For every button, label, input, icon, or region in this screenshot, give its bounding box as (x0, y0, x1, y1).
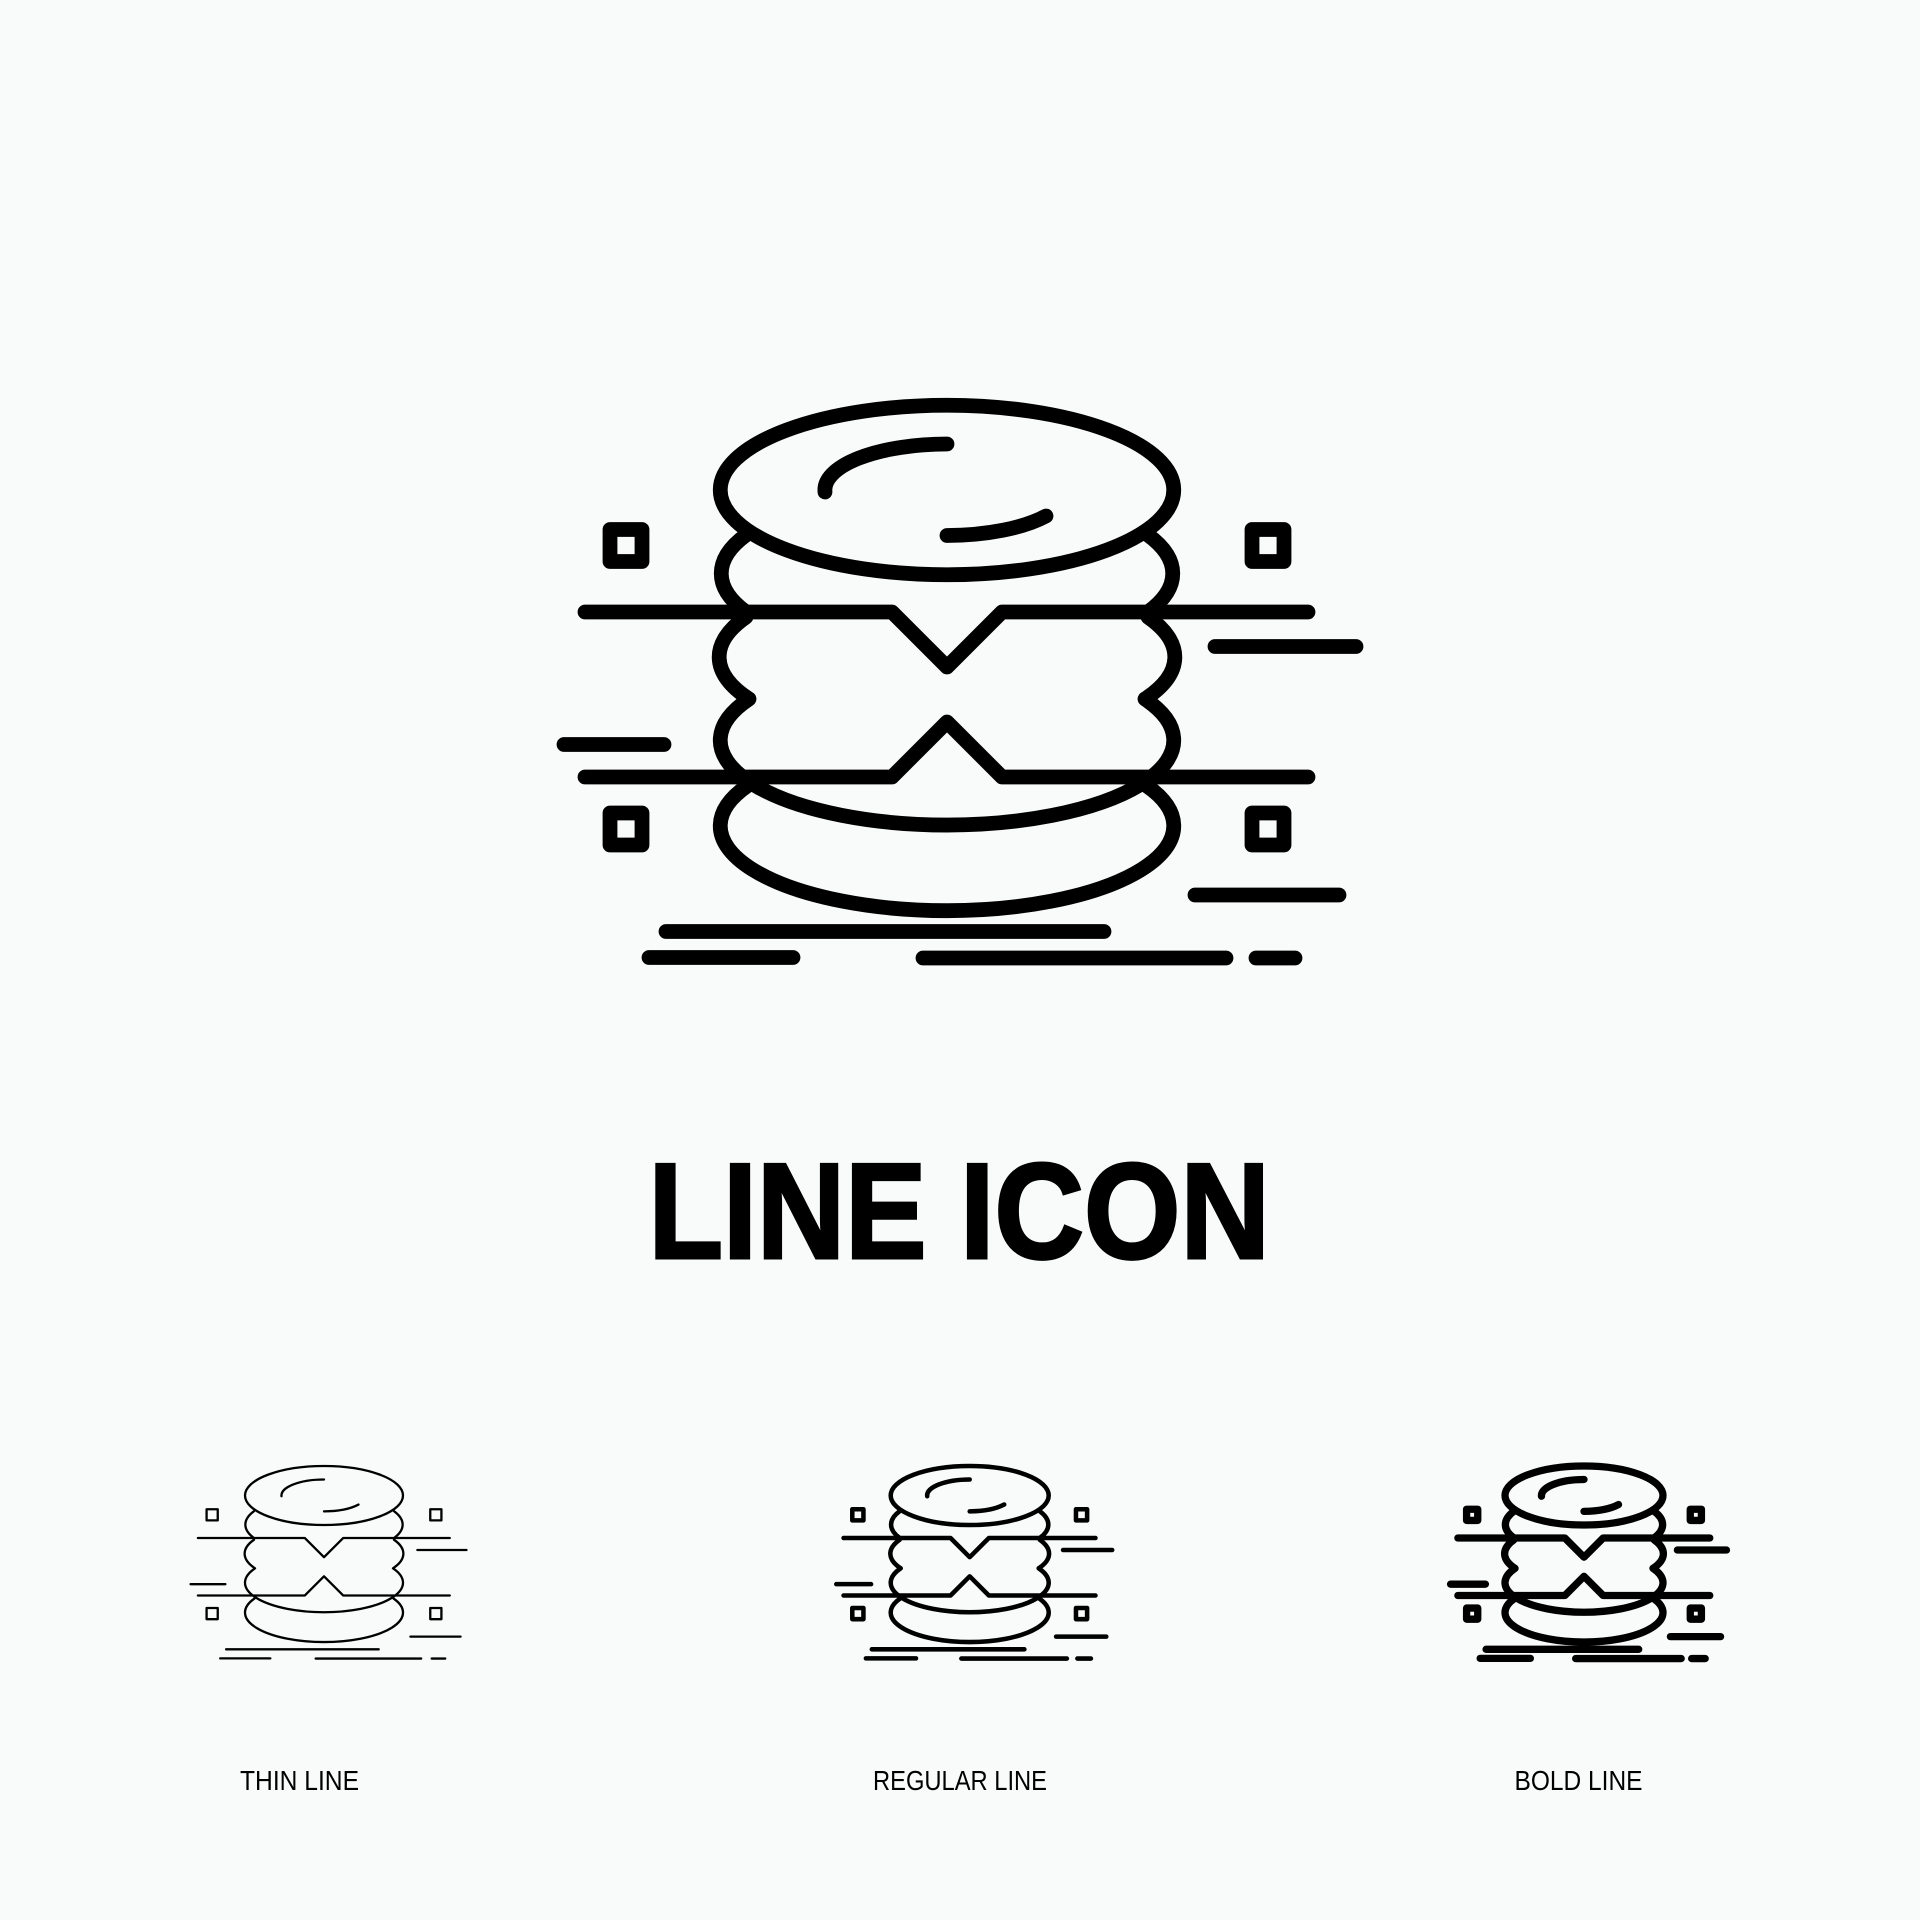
thin line icon (191, 1466, 466, 1659)
notched horizontal lines (585, 612, 1308, 777)
top disc ellipse (720, 405, 1174, 575)
speed lines (564, 646, 1356, 958)
regular line icon (836, 1466, 1112, 1659)
title: LINE ICON: LINE (648, 1135, 926, 1287)
bold line icon (1451, 1466, 1726, 1659)
main icon: database stack line icon (564, 405, 1356, 958)
small squares (610, 530, 1284, 845)
label: thin line: THIN LINE (240, 1765, 359, 1796)
disc highlights (825, 444, 1046, 536)
label: bold line: BOLD LINE (1514, 1765, 1642, 1796)
stack side curves and bottom disc (719, 535, 1175, 911)
label: regular line: REGULAR LINE (873, 1765, 1047, 1796)
title: LINE ICON (648, 1135, 1270, 1287)
title: LINE ICON: ICON (960, 1135, 1270, 1287)
